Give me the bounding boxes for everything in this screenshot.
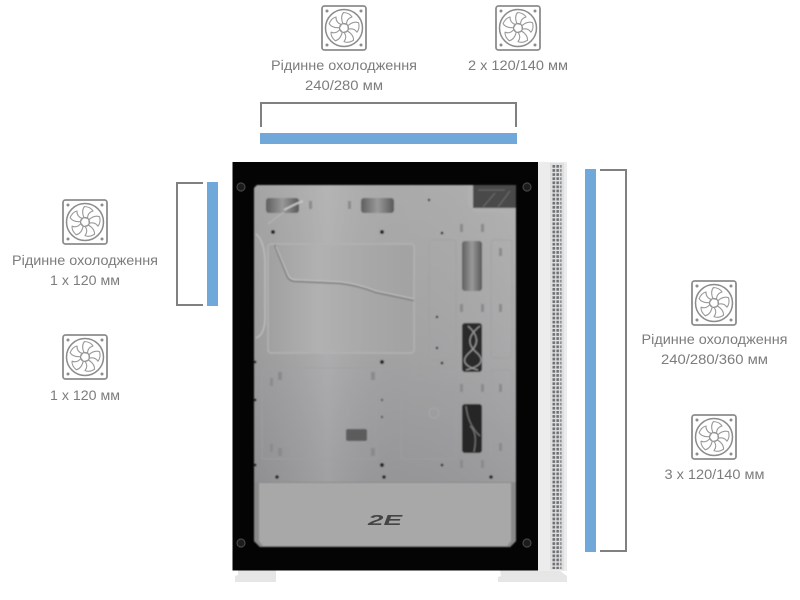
label: top liquid cooling: Рідинне охолодження <box>271 57 417 73</box>
black glass front panel <box>232 162 538 570</box>
rear cable slots <box>462 241 482 453</box>
PC case illustration <box>232 162 567 582</box>
standoffs <box>338 408 439 418</box>
label: top liquid cooling <box>271 57 417 93</box>
label: top liquid cooling: 240/280 мм <box>305 77 383 93</box>
icon: fan top right <box>496 6 540 50</box>
left zone bar and bracket <box>177 182 218 306</box>
label: front liquid cooling <box>642 331 788 367</box>
top zone bar and bracket <box>260 103 517 144</box>
label: front fans: 3 х 120/140 мм <box>664 466 764 482</box>
label: top fans: 2 х 120/140 мм <box>468 57 568 73</box>
motherboard cutout <box>268 244 414 353</box>
label: front liquid cooling: Рідинне охолодження <box>642 331 788 347</box>
glass screws <box>237 183 531 547</box>
2E logo: 2E <box>366 512 404 529</box>
icon: fan right upper <box>692 281 736 325</box>
icon: fan left lower <box>63 335 107 379</box>
label: rear liquid cooling: Рідинне охолодження <box>12 252 158 268</box>
icon: fan top left <box>322 6 366 50</box>
top cable holes <box>266 198 394 224</box>
PSU shroud <box>254 482 516 547</box>
case feet <box>235 570 567 582</box>
label: front liquid cooling: 240/280/360 мм <box>661 351 768 367</box>
back plate <box>254 185 516 547</box>
small grommet slot <box>346 429 367 441</box>
right zone bar and bracket <box>585 169 626 552</box>
rear fan outline <box>256 234 265 338</box>
stamped panels <box>262 240 512 459</box>
label: rear liquid cooling: 1 х 120 мм <box>50 272 120 288</box>
mounting holes <box>254 199 493 479</box>
icon: fan right lower <box>692 415 736 459</box>
small vertical slots <box>270 201 502 468</box>
interior of the case <box>254 185 516 547</box>
icon: fan left upper <box>63 200 107 244</box>
top right opening <box>468 185 516 212</box>
label: rear liquid cooling <box>12 252 158 288</box>
label: rear fan: 1 х 120 мм <box>50 387 120 403</box>
white side panel with mesh <box>537 162 567 571</box>
